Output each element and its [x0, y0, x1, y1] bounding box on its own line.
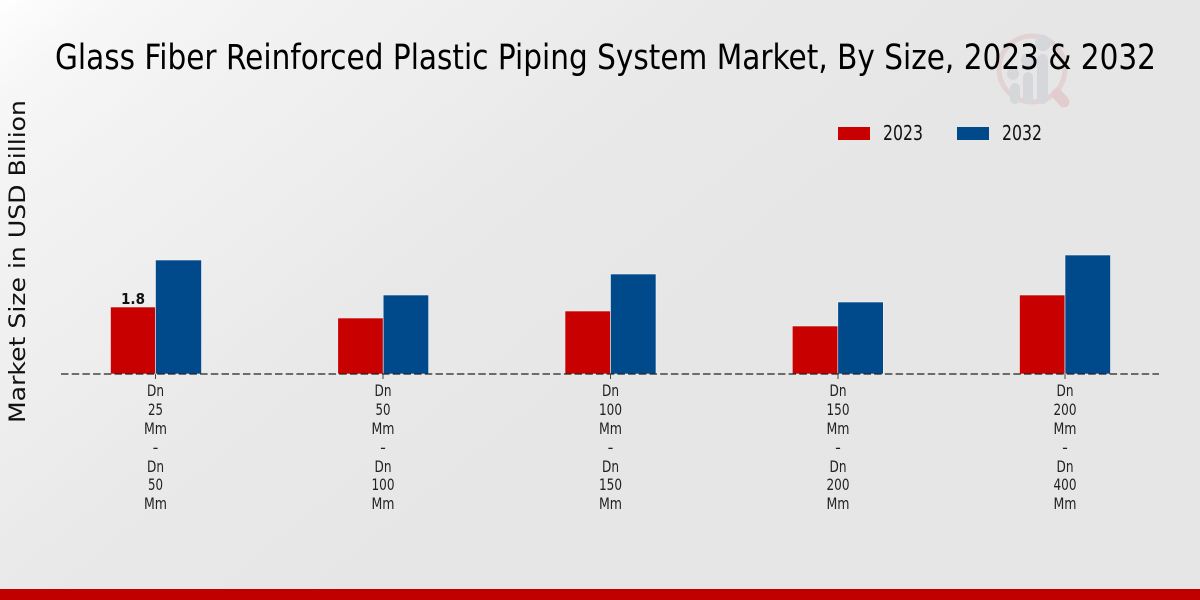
group: Dn 50 Mm - Dn 100 Mm	[338, 295, 429, 374]
category: Dn 25 Mm - Dn 50 Mm: Dn	[147, 381, 164, 400]
icon: watermark logo	[999, 35, 1065, 104]
baseline	[61, 373, 1159, 375]
category: Dn 100 Mm - Dn 150 Mm: Mm	[599, 494, 622, 513]
category: Dn 150 Mm - Dn 200 Mm: -	[835, 438, 841, 457]
category: Dn 200 Mm - Dn 400 Mm: Mm	[1054, 419, 1076, 438]
y axis label: Market Size in USD Billion	[6, 100, 31, 423]
category: Dn 25 Mm - Dn 50 Mm: -	[153, 438, 158, 457]
category: Dn 150 Mm - Dn 200 Mm: Dn	[830, 457, 846, 476]
category: Dn 200 Mm - Dn 400 Mm	[1054, 374, 1076, 513]
category: Dn 25 Mm - Dn 50 Mm: Dn	[147, 457, 164, 476]
legend item: 2023: 2023	[883, 121, 923, 145]
category: Dn 50 Mm - Dn 100 Mm: Dn	[374, 381, 392, 400]
legend item: 2032	[957, 121, 1042, 145]
group: Dn 200 Mm - Dn 400 Mm	[1020, 255, 1110, 374]
category: Dn 200 Mm - Dn 400 Mm: Mm	[1054, 494, 1076, 513]
legend	[838, 121, 1042, 145]
category: Dn 100 Mm - Dn 150 Mm: Dn	[602, 381, 619, 400]
value label: 1.8: 1.8	[121, 290, 145, 308]
category: Dn 25 Mm - Dn 50 Mm: Mm	[144, 419, 167, 438]
category: Dn 100 Mm - Dn 150 Mm	[599, 374, 622, 513]
category: Dn 150 Mm - Dn 200 Mm: 150	[826, 400, 850, 419]
legend item: 2032: 2032	[1002, 121, 1042, 145]
category: Dn 200 Mm - Dn 400 Mm: Dn	[1056, 457, 1074, 476]
category: Dn 50 Mm - Dn 100 Mm: Dn	[374, 457, 392, 476]
category: Dn 150 Mm - Dn 200 Mm: 200	[826, 475, 850, 494]
category: Dn 25 Mm - Dn 50 Mm: 25	[148, 400, 163, 419]
category: Dn 25 Mm - Dn 50 Mm: Mm	[144, 494, 167, 513]
x axis category labels	[144, 374, 1076, 513]
category: Dn 150 Mm - Dn 200 Mm: Dn	[830, 381, 846, 400]
category: Dn 150 Mm - Dn 200 Mm	[826, 374, 850, 513]
category: Dn 50 Mm - Dn 100 Mm: Mm	[372, 494, 394, 513]
category: Dn 100 Mm - Dn 150 Mm: -	[608, 438, 613, 457]
category: Dn 100 Mm - Dn 150 Mm: 100	[599, 400, 622, 419]
category: Dn 50 Mm - Dn 100 Mm: Mm	[372, 419, 394, 438]
category: Dn 50 Mm - Dn 100 Mm	[372, 374, 394, 513]
category: Dn 200 Mm - Dn 400 Mm: 400	[1054, 475, 1076, 494]
category: Dn 200 Mm - Dn 400 Mm: Dn	[1056, 381, 1074, 400]
category: Dn 200 Mm - Dn 400 Mm: -	[1062, 438, 1068, 457]
group: Dn 100 Mm - Dn 150 Mm	[565, 274, 656, 374]
category: Dn 50 Mm - Dn 100 Mm: -	[380, 438, 386, 457]
category: Dn 25 Mm - Dn 50 Mm	[144, 374, 167, 513]
bar chart	[61, 255, 1159, 374]
footer bar	[0, 589, 1200, 600]
category: Dn 100 Mm - Dn 150 Mm: 150	[599, 475, 622, 494]
category: Dn 100 Mm - Dn 150 Mm: Dn	[602, 457, 619, 476]
group: Dn 150 Mm - Dn 200 Mm	[792, 302, 883, 374]
group: Dn 25 Mm - Dn 50 Mm	[110, 260, 202, 374]
category: Dn 100 Mm - Dn 150 Mm: Mm	[599, 419, 622, 438]
legend item: 2023	[838, 121, 923, 145]
category: Dn 50 Mm - Dn 100 Mm: 100	[372, 475, 394, 494]
category: Dn 150 Mm - Dn 200 Mm: Mm	[826, 494, 850, 513]
category: Dn 200 Mm - Dn 400 Mm: 200	[1054, 400, 1076, 419]
category: Dn 50 Mm - Dn 100 Mm: 50	[376, 400, 390, 419]
category: Dn 25 Mm - Dn 50 Mm: 50	[148, 475, 163, 494]
category: Dn 150 Mm - Dn 200 Mm: Mm	[826, 419, 850, 438]
